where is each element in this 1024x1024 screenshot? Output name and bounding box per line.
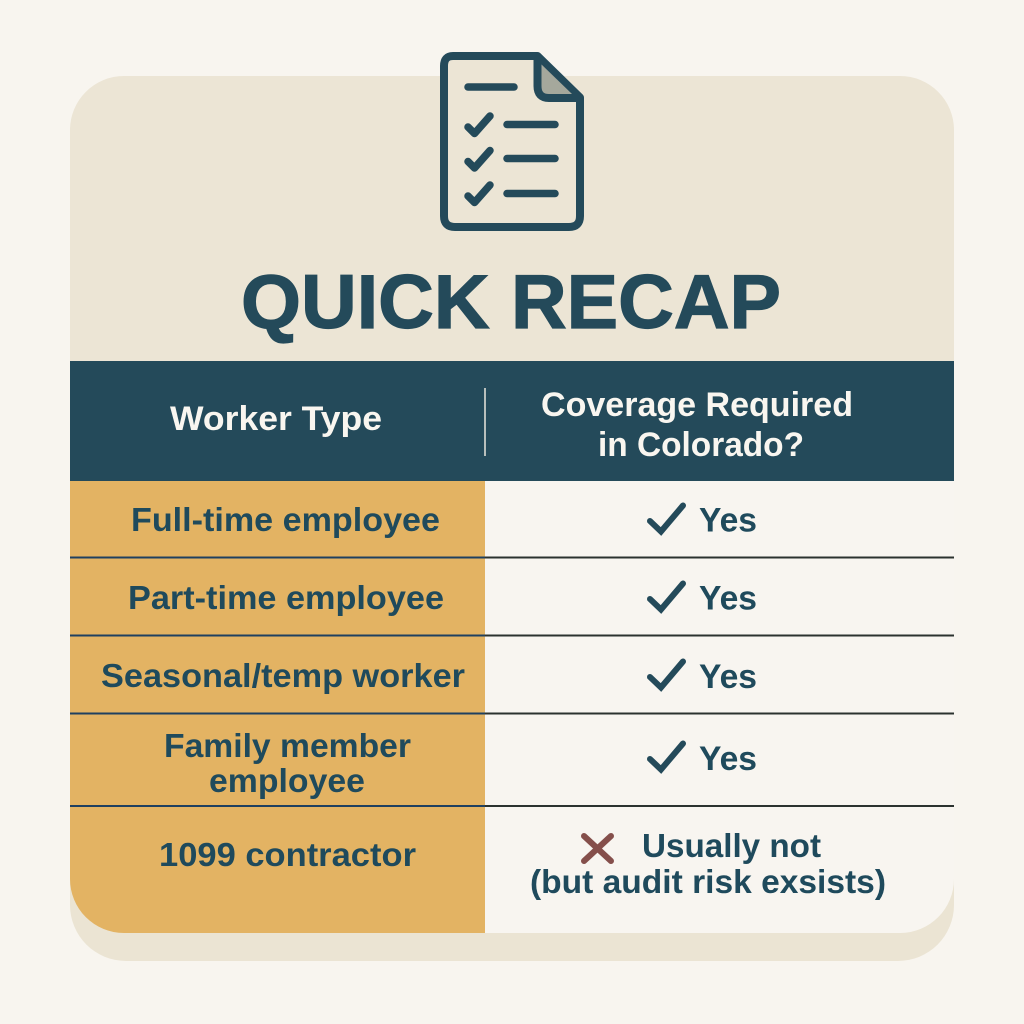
panel: recap card	[70, 76, 954, 933]
row 3: seasonal/temp worker: Seasonal/temp worker	[101, 657, 465, 694]
header separator	[484, 388, 486, 456]
title: QUICK RECAP	[241, 260, 781, 345]
row 4: family member employee	[164, 727, 757, 799]
icon: checklist document	[444, 56, 580, 227]
row 4: family member employee: employee	[209, 762, 365, 799]
table header band	[70, 361, 954, 481]
row 3: seasonal/temp worker	[101, 657, 757, 696]
row 1: full-time employee: Full-time employee	[131, 501, 440, 538]
header: coverage required	[541, 386, 853, 464]
row 2: part-time employee	[128, 579, 757, 618]
header: coverage required: in Colorado?	[598, 426, 804, 464]
card shadow	[70, 100, 954, 961]
row 2: part-time employee: Yes	[699, 580, 757, 618]
row 1: full-time employee	[131, 501, 757, 540]
icon: red cross	[584, 836, 611, 861]
row 5: 1099 contractor: (but audit risk exsists)	[530, 863, 886, 900]
row dividers	[70, 558, 954, 806]
row 1: full-time employee: Yes	[699, 502, 757, 540]
worker type column	[70, 481, 485, 933]
header: worker type: Worker Type	[170, 400, 382, 438]
header: coverage required: Coverage Required	[541, 386, 853, 424]
row 4: family member employee: Family member	[164, 727, 411, 764]
row 4: family member employee: Yes	[699, 740, 757, 778]
row 5: 1099 contractor: Usually not	[642, 827, 821, 864]
row 5: 1099 contractor: 1099 contractor	[159, 836, 416, 873]
row 3: seasonal/temp worker: Yes	[699, 658, 757, 696]
coverage column	[485, 481, 954, 933]
row 2: part-time employee: Part-time employee	[128, 579, 444, 616]
row 5: 1099 contractor	[159, 827, 886, 900]
